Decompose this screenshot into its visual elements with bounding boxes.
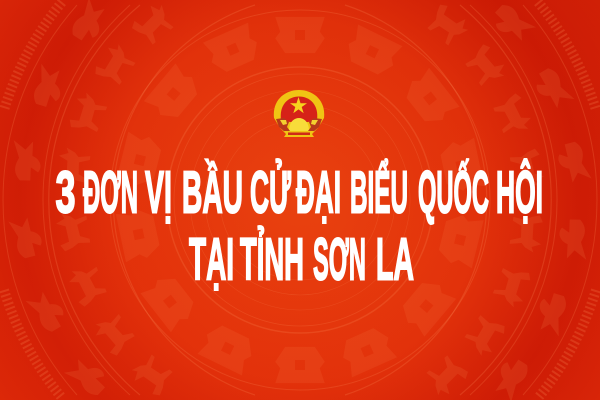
title line 2: TẠI: [189, 226, 234, 292]
title line 1: CỬ: [250, 158, 291, 226]
title: LA: [376, 226, 414, 292]
title line 1: ĐƠN: [83, 160, 138, 226]
emblem: red disc: [281, 96, 317, 122]
title line 2: [189, 226, 414, 292]
emblem: gold outer ring: [274, 90, 324, 134]
title line 1: BẦU: [182, 160, 243, 226]
emblem: sun and cogwheel: [289, 118, 309, 131]
title line 2: SƠN: [313, 226, 366, 292]
emblem: base scroll: [284, 131, 314, 137]
emblem: rice sheaves with red ribbons: [276, 118, 322, 132]
title line 1: ĐẠI: [296, 160, 341, 226]
title line 1: 3: [56, 160, 76, 226]
title line 1: QUỐC: [418, 160, 489, 226]
title: HỘI: [496, 158, 543, 226]
title line 2: TỈNH: [240, 226, 304, 292]
title line 1: [56, 158, 543, 226]
band: scenes r165: [116, 17, 484, 383]
title line 1: BIỂU: [350, 160, 408, 226]
title line 1: VỊ: [145, 160, 172, 226]
emblem: gold star: [290, 97, 307, 113]
